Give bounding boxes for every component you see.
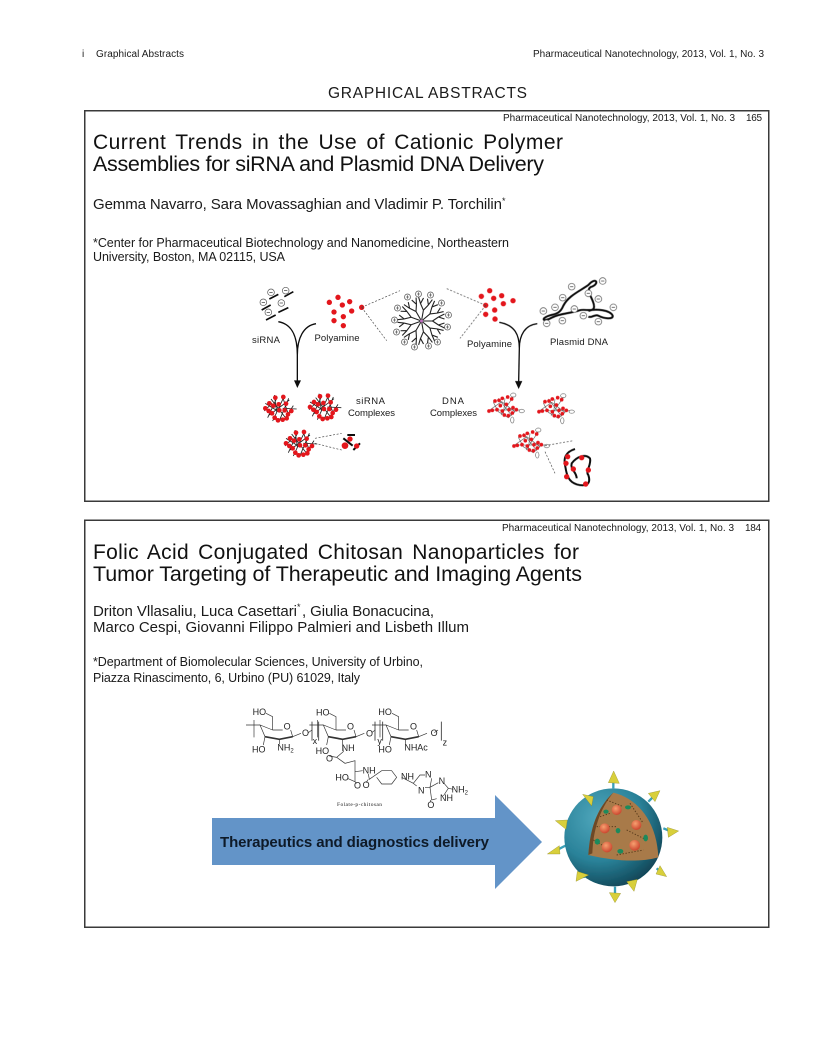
chemical structure: folate-p-chitosan: x (313, 736, 318, 746)
chemical structure: folate-p-chitosan: HO (253, 707, 266, 717)
article title: Current Trends in the Use of Cationic Polymer (93, 131, 563, 154)
chemical structure: folate-p-chitosan: NH (277, 743, 290, 753)
chemical structure: folate-p-chitosan: z (443, 737, 448, 747)
chemical structure: folate-p-chitosan: NH (342, 743, 355, 753)
chemical structure: folate-p-chitosan: NH (363, 765, 376, 775)
chemical structure: folate-p-chitosan: NH (401, 771, 414, 781)
affiliation: Piazza Rinascimento, 6, Urbino (PU) 61029, Italy (93, 671, 361, 685)
chemical structure: folate-p-chitosan: HO (378, 707, 392, 717)
chemical structure: folate-p-chitosan: N (418, 785, 424, 795)
complexes (263, 393, 341, 458)
page header: Pharmaceutical Nanotechnology, 2013, Vol. 1, No. 3 (533, 49, 764, 60)
arrow: therapeutics and diagnostics delivery (212, 795, 542, 889)
authors: Driton Vllasaliu, Luca Casettari (93, 603, 297, 620)
panel running head: 184 (745, 523, 761, 534)
arrow: therapeutics and diagnostics delivery: Therapeutics and diagnostics delivery (220, 834, 490, 851)
siRNA molecules (260, 287, 293, 320)
chemical structure: folate-p-chitosan: O (410, 721, 417, 731)
detail zoom (545, 441, 591, 487)
label: siRNA: siRNA (252, 335, 281, 346)
label: Polyamine right: Polyamine (467, 339, 512, 350)
chemical structure: folate-p-chitosan: O (427, 800, 434, 810)
page header (82, 49, 764, 60)
label: Plasmid DNA: Plasmid DNA (550, 337, 609, 348)
chemical structure: folate-p-chitosan: HO (335, 773, 349, 783)
label: Polyamine left: Polyamine (314, 333, 360, 344)
chemical structure: folate-p-chitosan: NH (452, 785, 465, 795)
chemical structure: folate-p-chitosan: O (366, 729, 373, 739)
article title (93, 131, 563, 176)
chemical structure: folate-p-chitosan (246, 707, 469, 810)
section title: GRAPHICAL ABSTRACTS (328, 85, 527, 102)
icon: dendrimer (392, 291, 452, 350)
chemical structure: folate-p-chitosan: HO (378, 745, 392, 755)
chemical structure: folate-p-chitosan: O (302, 728, 309, 738)
dendrimer connectors (362, 291, 400, 341)
polyamine dots (479, 288, 516, 322)
chemical structure: folate-p-chitosan: HO (252, 744, 265, 754)
sphere shell (564, 788, 662, 886)
complexes (487, 393, 574, 458)
label: DNA Complexes: DNA (442, 396, 465, 407)
article title: Tumor Targeting of Therapeutic and Imaging Agents (93, 562, 582, 586)
affiliation (93, 236, 509, 264)
label: siRNA Complexes: siRNA (356, 396, 386, 407)
chemical structure: folate-p-chitosan: O (347, 721, 354, 731)
panel running head: Pharmaceutical Nanotechnology, 2013, Vol. 1, No. 3 (503, 113, 735, 124)
polyamine dots (327, 295, 364, 328)
label: DNA Complexes: Complexes (430, 408, 477, 419)
page header: i (82, 49, 84, 60)
merge arrow (499, 322, 537, 389)
label: siRNA Complexes: Complexes (348, 408, 395, 419)
chemical structure: folate-p-chitosan: O (363, 780, 370, 790)
panel running head: Pharmaceutical Nanotechnology, 2013, Vol. 1, No. 3 (502, 523, 734, 534)
page header: Graphical Abstracts (96, 49, 184, 60)
chemical structure: folate-p-chitosan: 2 (465, 790, 469, 796)
authors (93, 602, 469, 636)
ligand stems (558, 782, 670, 895)
chemical structure: folate-p-chitosan: N (425, 770, 431, 780)
affiliation (93, 655, 423, 685)
yellow ligands (547, 771, 679, 903)
diagram: siRNA complexes (260, 287, 400, 458)
chemical structure: folate-p-chitosan: HO (316, 708, 329, 718)
article title (93, 541, 582, 586)
chemical structure: folate-p-chitosan: O (326, 753, 333, 763)
diagram: DNA complexes (446, 278, 617, 487)
detail zoom (315, 433, 360, 450)
chemical structure: folate-p-chitosan: y (377, 736, 382, 746)
article title: Assemblies for siRNA and Plasmid DNA Delivery (93, 152, 544, 176)
dendrimer connectors (446, 288, 486, 338)
structure caption: Folate-p-chitosan (337, 802, 382, 808)
affiliation: University, Boston, MA 02115, USA (93, 250, 286, 264)
panel: cationic polymer assemblies (85, 111, 769, 501)
merge arrow (278, 322, 316, 388)
authors: * (297, 602, 301, 612)
chemical structure: folate-p-chitosan: O (284, 721, 291, 731)
authors: , Giulia Bonacucina, (302, 603, 434, 620)
affiliation: *Department of Biomolecular Sciences, University of Urbino, (93, 655, 423, 669)
authors: Marco Cespi, Giovanni Filippo Palmieri and Lisbeth Illum (93, 619, 469, 636)
icon: nanoparticle sphere (547, 771, 679, 903)
panel running head: 165 (746, 113, 762, 124)
chemical structure: folate-p-chitosan: HO (316, 746, 329, 756)
chemical structure: folate-p-chitosan: O (431, 728, 438, 738)
label: DNA Complexes (430, 396, 477, 419)
chemical structure: folate-p-chitosan: N (439, 776, 445, 786)
chemical structure: folate-p-chitosan: O (354, 781, 361, 791)
label: siRNA Complexes (348, 396, 395, 419)
chemical structure: folate-p-chitosan: NH (440, 793, 453, 803)
authors: * (502, 196, 506, 206)
panel: folic acid chitosan nanoparticles (85, 520, 769, 927)
plasmid DNA (540, 278, 617, 327)
chemical structure: folate-p-chitosan: 2 (290, 748, 294, 754)
cut-away core (588, 793, 658, 861)
chemical structure: folate-p-chitosan: NHAc (404, 743, 428, 753)
affiliation: *Center for Pharmaceutical Biotechnology and Nanomedicine, Northeastern (93, 236, 509, 250)
article title: Folic Acid Conjugated Chitosan Nanoparticles for (93, 541, 579, 564)
authors: Gemma Navarro, Sara Movassaghian and Vladimir P. Torchilin (93, 196, 502, 213)
